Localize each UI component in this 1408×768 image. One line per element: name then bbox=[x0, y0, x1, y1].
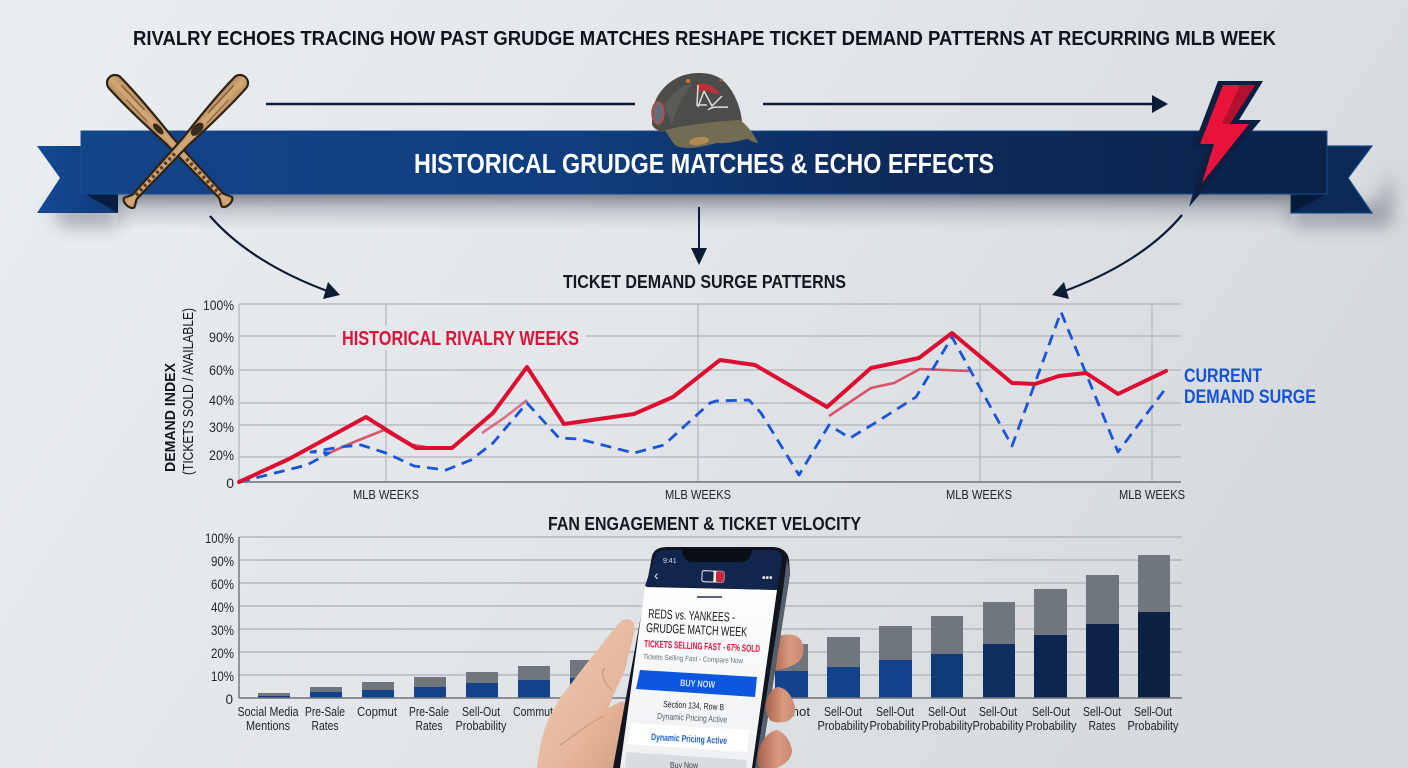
title: RIVALRY ECHOES TRACING HOW PAST GRUDGE MATCHES RESHAPE TICKET DEMAND PATTERNS AT RECURRING MLB WEEK bbox=[133, 28, 1277, 50]
y axis labels: 20% bbox=[211, 646, 234, 661]
x axis labels: MLB WEEKS bbox=[353, 487, 419, 502]
heading: ticket demand surge patterns: TICKET DEMAND SURGE PATTERNS bbox=[563, 272, 846, 292]
line chart: demand index bbox=[162, 297, 1316, 502]
bar category labels: Probability bbox=[972, 718, 1024, 733]
bar category labels: Pre-Sale bbox=[409, 704, 449, 719]
bar chart: fan engagement bbox=[205, 531, 1182, 733]
icon: crossed baseball bats bbox=[104, 72, 251, 211]
hand holding phone bbox=[537, 547, 804, 768]
x axis labels: MLB WEEKS bbox=[665, 487, 731, 502]
bar category labels bbox=[238, 704, 1179, 733]
arrow: bats to demand chart bbox=[210, 216, 340, 299]
bar category labels: Probability bbox=[456, 718, 507, 733]
arrow: lightning to demand chart bbox=[1052, 215, 1182, 299]
y axis labels: 30% bbox=[211, 623, 234, 638]
bar category labels: Sell-Out bbox=[979, 704, 1017, 719]
bar category labels: Pre-Sale bbox=[305, 704, 345, 719]
bar category labels: Sell-Out bbox=[824, 704, 862, 719]
y axis labels: 90% bbox=[209, 329, 234, 345]
phone: ••• bbox=[762, 573, 773, 584]
label: current demand surge bbox=[1184, 366, 1316, 408]
bar category labels: Sell-Out bbox=[1134, 704, 1172, 719]
phone: buy now button bbox=[636, 670, 757, 697]
bar category labels: mot bbox=[788, 704, 810, 719]
y axis labels: 0 bbox=[225, 692, 233, 707]
bars: lower navy segments bbox=[258, 612, 1170, 698]
phone: selling fast notice: TICKETS SELLING FAST - 67% SOLD bbox=[644, 639, 760, 655]
y axis labels: 30% bbox=[209, 419, 234, 435]
bar category labels: Probability bbox=[1026, 718, 1077, 733]
hand: palm and thumb bbox=[537, 619, 640, 768]
bar category labels: Sell-Out bbox=[1032, 704, 1070, 719]
bar category labels: Probability bbox=[870, 718, 921, 733]
x axis labels bbox=[353, 487, 1185, 502]
banner: historical grudge matches bbox=[37, 131, 1392, 230]
bar category labels: Probability bbox=[922, 718, 973, 733]
series: historical rivalry weeks bbox=[239, 333, 1166, 482]
phone: GRUDGE MATCH WEEK bbox=[646, 620, 748, 639]
y axis labels: 60% bbox=[211, 577, 234, 592]
phone screen bbox=[620, 587, 777, 768]
x axis labels: MLB WEEKS bbox=[946, 487, 1012, 502]
bar category labels: Rates bbox=[1088, 718, 1116, 733]
banner heading: HISTORICAL GRUDGE MATCHES & ECHO EFFECTS bbox=[414, 148, 994, 179]
phone: seat details: Section 134, Row B bbox=[663, 699, 724, 712]
bar category labels: Sell-Out bbox=[928, 704, 966, 719]
bar category labels: Commut bbox=[513, 704, 553, 719]
series: faded historical echoes bbox=[329, 369, 969, 453]
bar category labels: Rates bbox=[416, 718, 443, 733]
icon: red lightning bolt bbox=[1189, 81, 1263, 207]
y axis labels: 40% bbox=[209, 392, 234, 408]
bar category labels: Rates bbox=[312, 718, 339, 733]
bar category labels: Sell-Out bbox=[876, 704, 914, 719]
label: current demand surge: DEMAND SURGE bbox=[1184, 387, 1316, 408]
y axis labels: 100% bbox=[203, 297, 234, 313]
label: historical rivalry weeks: HISTORICAL RIVALRY WEEKS bbox=[342, 328, 579, 350]
bar category labels: Social Media bbox=[238, 704, 299, 719]
y axis labels: 40% bbox=[211, 600, 234, 615]
bar category labels: Sell-Out bbox=[462, 704, 500, 719]
y axis labels bbox=[205, 531, 234, 707]
bar category labels: Sell-Out bbox=[1083, 704, 1121, 719]
y axis labels: 60% bbox=[209, 362, 234, 378]
heading: fan engagement and ticket velocity: FAN ENGAGEMENT & TICKET VELOCITY bbox=[548, 514, 861, 534]
label: current demand surge: CURRENT bbox=[1184, 366, 1262, 387]
y axis labels: 100% bbox=[205, 531, 234, 546]
x axis labels: MLB WEEKS bbox=[1119, 487, 1185, 502]
bar category labels: Probability bbox=[1128, 718, 1179, 733]
bars: upper grey segments bbox=[258, 555, 1170, 698]
MLB logo bbox=[702, 571, 724, 582]
arrow: banner down to demand chart bbox=[691, 207, 707, 265]
y axis title: (TICKETS SOLD / AVAILABLE) bbox=[181, 308, 197, 475]
finger: middle bbox=[766, 687, 795, 722]
y axis labels: 0 bbox=[226, 475, 234, 491]
phone bbox=[613, 547, 790, 768]
phone header bar bbox=[645, 550, 782, 590]
phone: 9:41 bbox=[663, 558, 677, 565]
y axis labels: 10% bbox=[211, 669, 234, 684]
finger: upper bbox=[770, 635, 804, 671]
phone: match title: REDS vs. YANKEES - bbox=[648, 606, 735, 625]
y axis title: DEMAND INDEX bbox=[162, 363, 179, 472]
bar category labels: Probability bbox=[818, 718, 869, 733]
phone: ‹ bbox=[654, 567, 659, 583]
arrow: bats to cap bbox=[266, 103, 635, 105]
y axis labels: 90% bbox=[211, 554, 234, 569]
phone: dynamic pricing card bbox=[627, 723, 750, 752]
phone: secondary button bbox=[625, 752, 747, 768]
bar category labels: Copmut bbox=[357, 704, 397, 719]
phone: Tickets Selling Fast - Compare Now bbox=[643, 652, 744, 665]
y axis labels: 20% bbox=[209, 447, 234, 463]
y axis labels bbox=[203, 297, 234, 491]
phone: buy now button: BUY NOW bbox=[680, 678, 715, 691]
bar category labels: Mentions bbox=[246, 718, 290, 733]
finger: lower bbox=[758, 730, 792, 768]
series: current demand surge bbox=[239, 312, 1166, 482]
y axis title bbox=[162, 308, 197, 475]
phone: dynamic pricing card: Dynamic Pricing Active bbox=[651, 732, 727, 747]
icon: worn baseball cap bbox=[652, 73, 758, 148]
arrow: cap to lightning bbox=[763, 95, 1168, 113]
phone: Dynamic Pricing Active bbox=[657, 711, 727, 725]
